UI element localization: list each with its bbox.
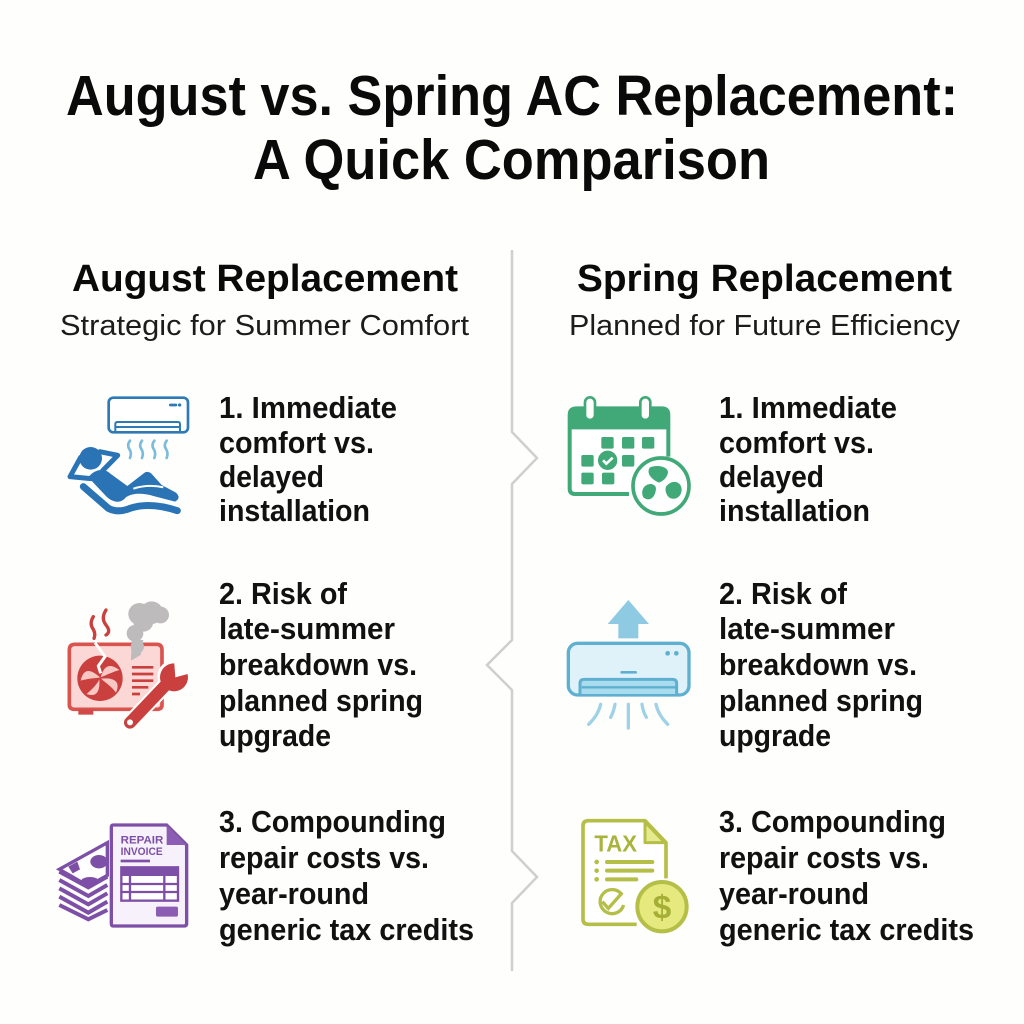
- subheading: August: Strategic for Summer Comfort: [60, 310, 469, 342]
- text: item 2: planned spring: [719, 683, 923, 718]
- text: item 1: installation: [719, 493, 870, 528]
- text: item 2: breakdown vs.: [719, 647, 917, 682]
- text: item 3: year-round: [219, 876, 369, 911]
- text: item 2: 2. Risk of: [719, 576, 848, 611]
- text: item 2: late-summer: [219, 611, 395, 646]
- text: item 2: planned spring: [219, 683, 423, 718]
- text: item 2: upgrade: [219, 718, 331, 753]
- panel: Spring replacement: [568, 258, 974, 947]
- text: item 1: [219, 390, 397, 528]
- text: item 2: breakdown vs.: [219, 647, 417, 682]
- text: item 3: [719, 804, 974, 947]
- text: item 1: delayed: [719, 459, 824, 494]
- text: item 3: year-round: [719, 876, 869, 911]
- text: item 2: [719, 576, 923, 753]
- icon: tax document with dollar coin: $: [653, 889, 672, 926]
- center divider with chevrons: [487, 250, 537, 971]
- title: August vs. Spring AC Replacement:: [66, 64, 958, 128]
- icon: repair invoice and cash stack: [59, 825, 187, 926]
- icon: calendar with fan: [568, 397, 689, 514]
- text: item 1: [719, 390, 897, 528]
- text: item 1: 1. Immediate: [719, 390, 897, 425]
- text: item 1: installation: [219, 493, 370, 528]
- icon: tax document with dollar coin: TAX: [594, 830, 637, 856]
- text: item 1: 1. Immediate: [219, 390, 397, 425]
- text: item 3: 3. Compounding: [719, 804, 946, 839]
- icon: efficient AC with up arrow: [568, 600, 689, 728]
- icon: tax document with dollar coin: [583, 821, 687, 931]
- text: item 2: upgrade: [719, 718, 831, 753]
- text: item 2: [219, 576, 423, 753]
- icon: repair invoice and cash stack: REPAIR: [121, 834, 163, 846]
- text: item 1: delayed: [219, 459, 324, 494]
- icon: repair invoice and cash stack: INVOICE: [121, 846, 163, 858]
- heading: Spring Replacement: Spring Replacement: [577, 258, 952, 300]
- icon: person relaxing under AC: [70, 398, 188, 511]
- title: A Quick Comparison: [253, 128, 770, 192]
- text: item 2: late-summer: [719, 611, 895, 646]
- text: item 3: repair costs vs.: [719, 840, 929, 875]
- title: [66, 64, 958, 192]
- text: item 2: 2. Risk of: [219, 576, 348, 611]
- text: item 3: generic tax credits: [219, 912, 474, 947]
- text: item 1: comfort vs.: [219, 425, 374, 460]
- subheading: Spring: Planned for Future Efficiency: [569, 310, 961, 342]
- icon: broken outdoor unit with wrench: [69, 601, 191, 725]
- panel: August replacement: [59, 258, 474, 947]
- text: item 3: [219, 804, 474, 947]
- text: item 3: 3. Compounding: [219, 804, 446, 839]
- text: item 3: repair costs vs.: [219, 840, 429, 875]
- text: item 1: comfort vs.: [719, 425, 874, 460]
- heading: August Replacement: August Replacement: [72, 258, 458, 300]
- text: item 3: generic tax credits: [719, 912, 974, 947]
